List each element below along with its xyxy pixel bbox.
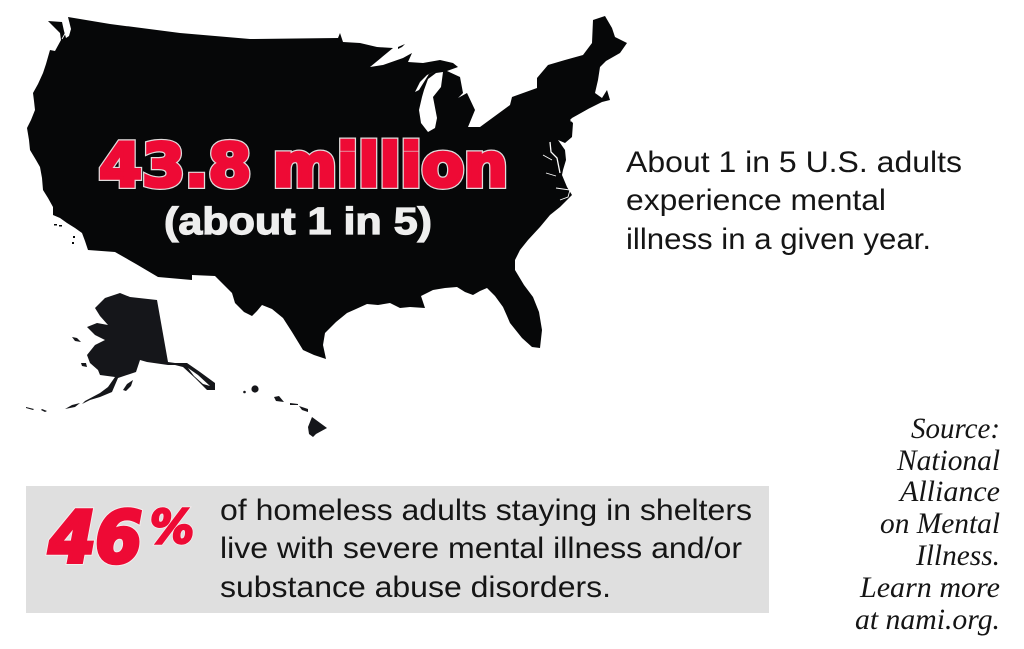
map: Lake Michigan <box>419 72 443 132</box>
big number: 46% <box>48 497 194 579</box>
text block: homeless description: live with severe mental illness and/or <box>220 532 742 565</box>
map: Alaska <box>26 293 215 412</box>
source note: at nami.org. <box>855 604 1000 636</box>
text block: homeless description: of homeless adults staying in shelters <box>220 494 752 527</box>
map: Hawaii <box>243 385 327 437</box>
source note: Source: <box>911 413 1000 445</box>
subheading: about 1 in 5: (about 1 in 5) <box>164 201 432 243</box>
text block: homeless description <box>220 494 752 604</box>
text block: adults statistic: About 1 in 5 U.S. adults <box>626 146 962 179</box>
map: United States silhouette <box>26 16 627 437</box>
source note: on Mental <box>880 508 1000 540</box>
text block: adults statistic: experience mental <box>626 184 886 217</box>
source note: Learn more <box>859 572 1000 604</box>
map: contiguous United States <box>27 16 627 359</box>
headline: 43.8 million: 43.8 million <box>99 131 508 201</box>
source note <box>855 413 1000 636</box>
big number: 46%: 46 <box>48 497 142 579</box>
big number: 46%: 46 <box>48 497 142 579</box>
big number: 46%: % <box>150 500 194 554</box>
source note: National <box>896 445 1000 477</box>
map: California channel islands <box>54 224 75 244</box>
source note: Illness. <box>915 540 1000 572</box>
text block: adults statistic: illness in a given year. <box>626 223 931 256</box>
big number: 46%: % <box>150 500 194 554</box>
text block: homeless description: substance abuse disorders. <box>220 571 611 604</box>
headline: 43.8 million: 43.8 million <box>99 131 508 201</box>
source note: Alliance <box>898 476 1000 508</box>
panel: homeless adults statistic <box>26 486 769 613</box>
text block: adults statistic <box>626 146 962 256</box>
